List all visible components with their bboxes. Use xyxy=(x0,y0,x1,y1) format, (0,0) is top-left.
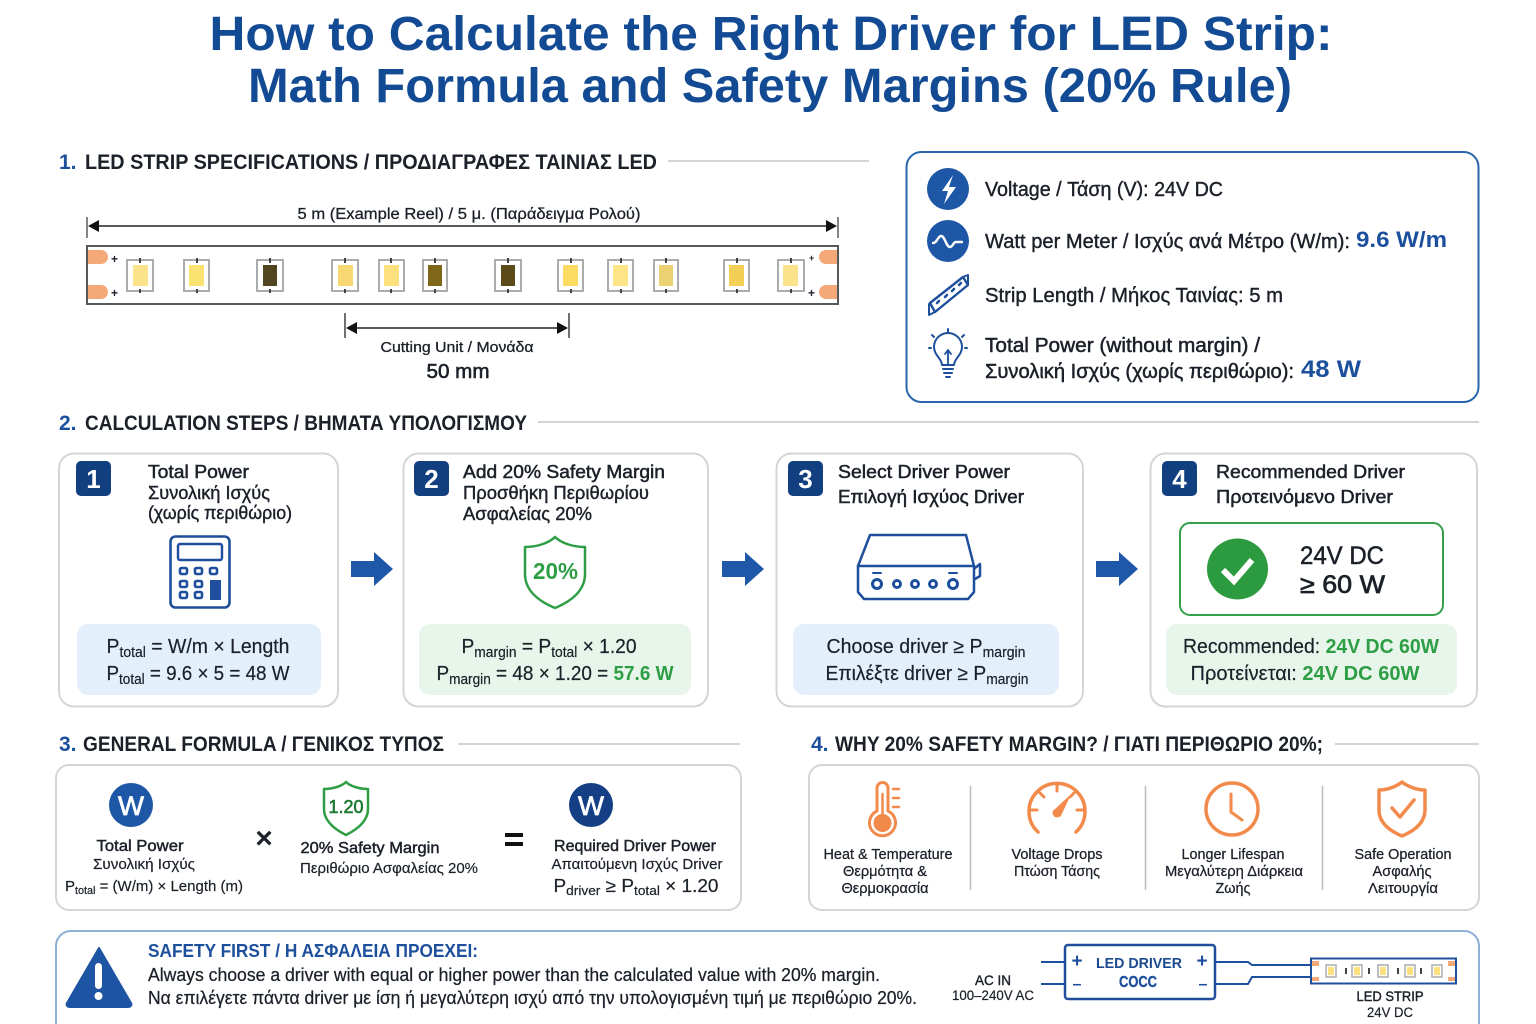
LED strip diagram: + xyxy=(111,286,118,300)
formula term: required driver power: P xyxy=(554,876,566,896)
LED strip diagram xyxy=(87,206,838,383)
heading: general formula: 3. xyxy=(59,733,77,756)
step title: Προτεινόμενο Driver xyxy=(1216,486,1393,507)
formula term: total power: total xyxy=(75,885,95,897)
step title: Add 20% Safety Margin xyxy=(463,461,665,482)
formula box: margin xyxy=(474,645,517,661)
driver box: LED DRIVER xyxy=(1096,955,1182,972)
length dimension arrow xyxy=(87,206,838,238)
text: watt per meter: 9.6 W/m xyxy=(1356,227,1447,252)
wires xyxy=(1041,962,1311,984)
text: total power: 48 W xyxy=(1301,356,1361,383)
LED strip diagram: + xyxy=(809,253,814,263)
step title xyxy=(1216,461,1405,507)
recommendation card: ≥ 60 W xyxy=(1300,571,1385,599)
reason: heat and temperature: Θερμοκρασία xyxy=(842,881,928,897)
driver box: + xyxy=(1071,951,1083,972)
reason: longer lifespan: Μεγαλύτερη Διάρκεια xyxy=(1165,864,1303,880)
text: voltage: Voltage / Τάση (V): 24V DC xyxy=(985,179,1223,201)
formula term: total power: P xyxy=(65,878,75,895)
formula box: = P xyxy=(517,636,551,658)
formula term: safety margin xyxy=(300,782,478,877)
formula box: total xyxy=(119,645,146,661)
driver box: COCC xyxy=(1119,974,1157,991)
formula box: 57.6 W xyxy=(613,663,674,685)
step title: Total Power xyxy=(148,461,249,482)
heading: why 20% safety margin: 4. xyxy=(811,733,829,756)
formula term: total power: = (W/m) × Length (m) xyxy=(95,878,243,895)
driver box xyxy=(1065,945,1215,999)
heading: calculation steps: CALCULATION STEPS / ΒΗΜΑΤΑ ΥΠΟΛΟΓΙΣΜΟΥ xyxy=(85,412,527,435)
step title: Επιλογή Ισχύος Driver xyxy=(838,486,1024,507)
formula box: P xyxy=(436,663,450,685)
reason: safe operation: Λειτουργία xyxy=(1368,881,1438,897)
driver box: – xyxy=(1073,976,1082,993)
icon: LED driver box xyxy=(858,535,980,599)
formula term: required driver power: total xyxy=(634,883,660,898)
formula term: total power xyxy=(65,783,243,897)
arrow: step 2 to 3 xyxy=(722,552,764,586)
AC input label xyxy=(952,973,1034,1003)
formula box: margin xyxy=(449,672,491,688)
panel: step 2 safety margin xyxy=(404,454,708,706)
reason: longer lifespan xyxy=(1165,783,1303,897)
formula box: = W/m × Length xyxy=(146,636,290,658)
cutting unit dimension: 50 mm xyxy=(426,361,490,383)
panel: step 3 select driver xyxy=(776,454,1083,706)
equals sign xyxy=(505,833,523,846)
formula term: required driver power: Απαιτούμενη Ισχύς Driver xyxy=(552,856,723,873)
formula term: required driver power: ≥ P xyxy=(600,876,634,896)
panel: safety first xyxy=(56,931,1479,1024)
formula term: total power: Total Power xyxy=(96,838,184,855)
cutting unit dimension: Cutting Unit / Μονάδα xyxy=(380,339,534,356)
text: watt per meter xyxy=(985,227,1447,253)
formula term: required driver power: × 1.20 xyxy=(660,876,718,896)
recommendation card xyxy=(1180,523,1443,615)
multiply sign: × xyxy=(255,822,273,855)
formula term: total power: W xyxy=(118,791,145,821)
reason: longer lifespan: Longer Lifespan xyxy=(1182,847,1284,863)
AC input label: AC IN xyxy=(975,973,1011,988)
heading: LED strip specifications: LED STRIP SPECIFICATIONS / ΠΡΟΔΙΑΓΡΑΦΕΣ ΤΑΙΝΙΑΣ LED xyxy=(85,151,657,174)
reason: heat and temperature: Heat & Temperature xyxy=(824,847,952,863)
driver box: – xyxy=(1199,976,1208,993)
LED strip label: LED STRIP xyxy=(1356,989,1424,1004)
icon: 20% shield xyxy=(525,537,585,608)
step number 4: 4 xyxy=(1172,464,1187,494)
heading: general formula: GENERAL FORMULA / ΓΕΝΙΚΟΣ ΤΥΠΟΣ xyxy=(83,733,444,756)
LED strip label: 24V DC xyxy=(1367,1005,1413,1020)
safety text: SAFETY FIRST / Η ΑΣΦΑΛΕΙΑ ΠΡΟΕΧΕΙ: xyxy=(148,941,478,961)
text: total power: Συνολική Ισχύς (χωρίς περιθώριο): xyxy=(985,361,1294,383)
LED strip diagram: + xyxy=(808,286,815,300)
reason: voltage drops: Πτώση Τάσης xyxy=(1014,864,1100,880)
safety text: Always choose a driver with equal or higher power than the calculated value with 20% margin. xyxy=(148,965,880,985)
driver box: + xyxy=(1196,951,1208,972)
LED strip diagram: + xyxy=(111,252,118,266)
formula box: P xyxy=(106,663,120,685)
formula box: = 9.6 × 5 = 48 W xyxy=(145,663,290,685)
reason: heat and temperature xyxy=(824,783,952,897)
result box xyxy=(1166,624,1457,695)
reason: voltage drops: Voltage Drops xyxy=(1012,847,1102,863)
panel: step 1 total power xyxy=(59,454,338,706)
panel: strip specification summary xyxy=(906,152,1478,402)
text: strip length: Strip Length / Μήκος Ταινίας: 5 m xyxy=(985,285,1283,307)
step number 4 xyxy=(1162,461,1197,496)
formula box: margin xyxy=(983,645,1026,661)
step title: Ασφαλείας 20% xyxy=(463,504,592,524)
reason: safe operation: Safe Operation xyxy=(1354,847,1452,863)
panel: step 4 recommended driver xyxy=(1150,454,1477,706)
formula box: total xyxy=(551,645,577,661)
step title: Select Driver Power xyxy=(838,461,1010,482)
reason: safe operation: Ασφαλής xyxy=(1372,864,1432,880)
icon: strip length xyxy=(929,275,968,315)
formula term: required driver power: W xyxy=(578,791,605,821)
cutting unit dimension xyxy=(345,313,569,383)
reason: safe operation xyxy=(1354,782,1452,897)
text: watt per meter: Watt per Meter / Ισχύς ανά Μέτρο (W/m): xyxy=(985,231,1350,253)
step title xyxy=(838,461,1024,507)
formula box: P xyxy=(106,636,120,658)
formula box: total xyxy=(119,672,145,688)
step title xyxy=(148,461,292,523)
formula box: margin xyxy=(986,672,1028,688)
safety text: Να επιλέγετε πάντα driver με ίση ή μεγαλύτερη ισχύ από την υπολογισμένη τιμή με περιθώριο 20%. xyxy=(148,988,917,1008)
formula box xyxy=(419,624,691,695)
formula term: safety margin: 1.20 xyxy=(328,797,364,817)
copper pads xyxy=(88,250,837,299)
mini LED strip xyxy=(1311,958,1456,984)
icon: warning triangle xyxy=(67,948,131,1007)
step number 3 xyxy=(788,461,823,496)
icon: check xyxy=(1207,538,1268,600)
reason: heat and temperature: Θερμότητα & xyxy=(843,864,927,880)
heading: calculation steps xyxy=(59,412,1479,435)
step title: Recommended Driver xyxy=(1216,461,1405,482)
reason: voltage drops xyxy=(1012,783,1102,880)
step number 1: 1 xyxy=(86,464,101,494)
reason: longer lifespan: Ζωής xyxy=(1216,881,1251,897)
step number 3: 3 xyxy=(798,464,813,494)
result box: Recommended: 24V DC 60W xyxy=(1183,636,1439,658)
step number 2 xyxy=(414,461,449,496)
formula term: required driver power: Required Driver Power xyxy=(554,838,716,855)
heading: why 20% safety margin: WHY 20% SAFETY MARGIN? / ΓΙΑΤΙ ΠΕΡΙΘΩΡΙΟ 20%; xyxy=(835,733,1323,756)
LED strip label xyxy=(1356,989,1424,1020)
strip body xyxy=(87,246,838,304)
step title: Προσθήκη Περιθωρίου xyxy=(463,483,649,503)
wiring diagram xyxy=(952,945,1456,1020)
formula box: = 48 × 1.20 = xyxy=(491,663,613,685)
arrow: step 3 to 4 xyxy=(1096,552,1138,586)
icon: light bulb xyxy=(929,329,967,377)
text: total power: Total Power (without margin) / xyxy=(985,335,1260,357)
formula box: × 1.20 xyxy=(577,636,636,658)
AC input label: 100–240V AC xyxy=(952,988,1034,1003)
panel: general formula xyxy=(56,765,741,910)
text: total power xyxy=(985,335,1361,383)
length dimension arrow: 5 m (Example Reel) / 5 μ. (Παράδειγμα Ρολού) xyxy=(298,206,640,223)
heading: calculation steps: 2. xyxy=(59,412,77,435)
recommendation card: 24V DC xyxy=(1300,542,1384,570)
formula box: Επιλέξτε driver ≥ P xyxy=(826,663,993,685)
formula term: safety margin: Περιθώριο Ασφαλείας 20% xyxy=(300,860,478,877)
title: Math Formula and Safety Margins (20% Rule) xyxy=(248,60,1292,113)
formula box xyxy=(77,624,321,695)
step number 2: 2 xyxy=(424,464,439,494)
heading: general formula xyxy=(59,733,740,756)
panel: reasons for margin xyxy=(809,765,1479,910)
arrow: step 1 to 2 xyxy=(351,552,393,586)
formula term: safety margin: 20% Safety Margin xyxy=(300,840,440,857)
heading: LED strip specifications: 1. xyxy=(59,151,77,174)
icon: calculator xyxy=(170,536,230,608)
icon: voltage bolt xyxy=(927,168,969,210)
formula box: Choose driver ≥ P xyxy=(826,636,986,658)
LED chips xyxy=(127,258,804,293)
formula term: total power: Συνολική Ισχύς xyxy=(93,856,195,873)
formula term: required driver power xyxy=(552,783,723,898)
result box: Προτείνεται: 24V DC 60W xyxy=(1190,663,1420,685)
formula box: P xyxy=(462,636,475,658)
step title xyxy=(463,461,665,524)
step title: Συνολική Ισχύς xyxy=(148,483,270,503)
step title: (χωρίς περιθώριο) xyxy=(148,503,292,523)
title xyxy=(210,8,1332,113)
title: How to Calculate the Right Driver for LED Strip: xyxy=(210,8,1332,61)
step number 1 xyxy=(76,461,111,496)
formula term: required driver power: driver xyxy=(566,883,601,898)
icon: wave xyxy=(927,220,969,262)
safety text xyxy=(148,941,917,1008)
icon: 20% shield: 20% xyxy=(533,558,578,584)
formula box xyxy=(793,624,1059,695)
